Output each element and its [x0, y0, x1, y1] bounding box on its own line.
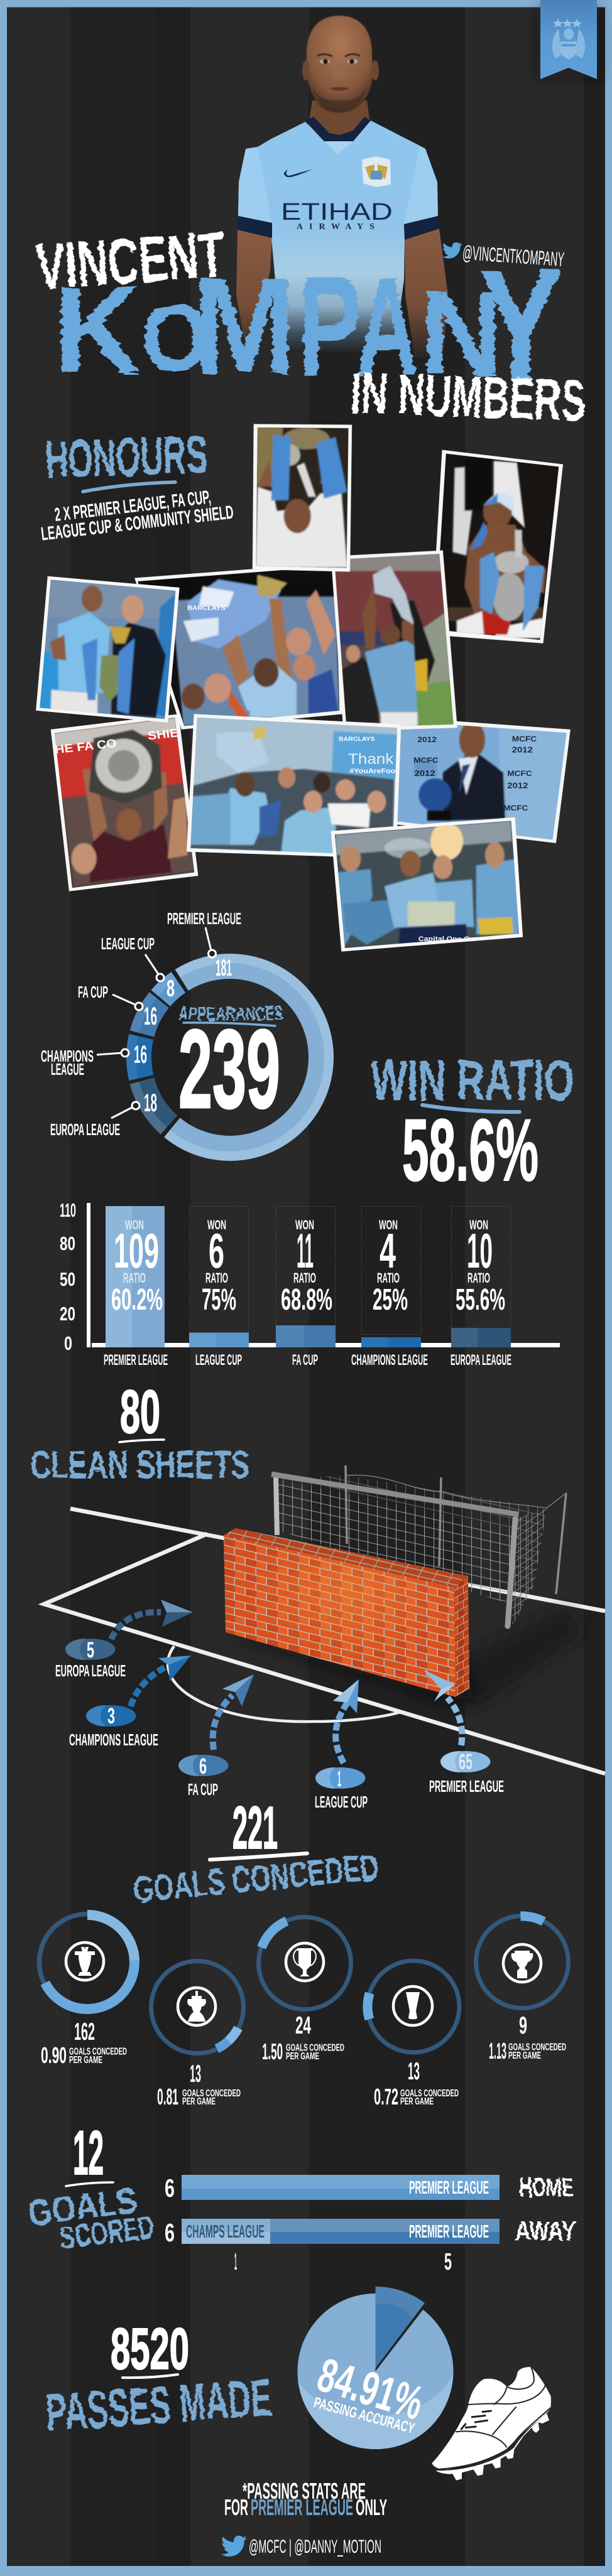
- honours heading: [38, 424, 234, 545]
- footnote: PREMIER LEAGUE: [251, 2494, 353, 2520]
- wall side: [454, 1576, 469, 1697]
- photo: league cup celebration: [331, 817, 523, 952]
- photo: champions with trophy: [253, 424, 352, 572]
- club ribbon with crest: [537, 0, 600, 82]
- passing accuracy pie chart: [298, 2287, 454, 2449]
- arrow: europa league: 5: [87, 1638, 94, 1663]
- arrow: europa league: EUROPA LEAGUE: [55, 1661, 126, 1680]
- nike swoosh: [284, 170, 312, 177]
- goals scored heading: SCORED: [58, 2209, 156, 2256]
- bar: fa cup: FA CUP: [292, 1352, 318, 1369]
- photo: league cup celebration: Capital One Cup: [418, 935, 479, 943]
- bar: league cup: 6: [209, 1223, 224, 1278]
- photo: awards night: MCFC: [507, 769, 532, 778]
- footnote: *PASSING STATS ARE: [243, 2478, 366, 2504]
- bar: league cup: 75%: [202, 1283, 236, 1317]
- photo: fa cup dressing room: [429, 449, 564, 644]
- photo: premier league crowd: [133, 563, 343, 731]
- bar: premier league: RATIO: [123, 1270, 146, 1286]
- segment: europa league: [90, 918, 369, 1197]
- wall top: [224, 1528, 468, 1587]
- photo: awards night: 2012: [415, 768, 435, 778]
- bar: fa cup: [276, 1218, 336, 1369]
- competition labels: LEAGUE CUP: [101, 934, 155, 953]
- photo: title celebration: Thank you: [348, 752, 425, 767]
- icon: europa league trophy: [503, 1944, 541, 1982]
- arrow: league cup: 1: [337, 1767, 341, 1791]
- arrow: fa cup: [178, 1674, 254, 1799]
- values: 9: [519, 2012, 527, 2039]
- collar: [305, 117, 371, 141]
- away goals bar: PREMIER LEAGUE: [409, 2222, 489, 2242]
- ring: league cup: GOALS CONCEDED: [400, 2088, 459, 2099]
- segment: premier league: [94, 921, 366, 1194]
- passes made heading: PASSES MADE: [44, 2368, 274, 2442]
- wins bar chart: [60, 1199, 560, 1369]
- segment: league cup: [90, 918, 369, 1197]
- win ratio: [371, 1048, 574, 1199]
- ring: league cup: [357, 1950, 470, 2110]
- bar: europa league: [451, 1218, 511, 1369]
- passes made heading: 8520: [111, 2316, 189, 2381]
- back stays: [346, 1465, 566, 1594]
- appearances donut chart: [41, 909, 369, 1197]
- appearances heading: APPEARANCES: [178, 1003, 283, 1025]
- bar: premier league: 109: [114, 1223, 159, 1278]
- icon: football boot: [432, 2367, 551, 2481]
- arrow: premier league: [423, 1670, 504, 1796]
- goal with net: [271, 1465, 584, 1708]
- footer credits: [221, 2536, 381, 2557]
- kompany: K: [53, 260, 141, 399]
- bar: league cup: [189, 1218, 249, 1369]
- net: [277, 1479, 513, 1603]
- wins bar chart: PREMIER LEAGUE: [104, 1352, 168, 1369]
- away goals bar: 6: [165, 2218, 175, 2247]
- crest: [552, 19, 585, 60]
- away goals bar: [165, 2216, 576, 2275]
- competition labels: [41, 909, 241, 1139]
- arrow: champions league: 3: [107, 1704, 115, 1728]
- photo: kompany and manager: [35, 576, 180, 723]
- arrow: champions league: [69, 1656, 191, 1749]
- segment values: 16: [134, 1041, 147, 1069]
- photo: awards night: [390, 717, 574, 845]
- ring: fa cup: 0.81: [157, 2084, 178, 2110]
- y-axis labels: 110: [60, 1199, 76, 1221]
- wins bar chart: CHAMPIONS LEAGUE: [351, 1352, 428, 1369]
- home goals bar: 6: [165, 2174, 175, 2202]
- ring: fa cup: 13: [190, 2061, 201, 2088]
- bar: premier league: WON: [125, 1218, 144, 1232]
- home goals bar: PREMIER LEAGUE: [409, 2178, 489, 2198]
- segment values: 18: [144, 1089, 157, 1117]
- honours heading: HONOURS: [44, 424, 208, 489]
- honours text: [38, 485, 234, 545]
- arrow: premier league: 65: [459, 1750, 473, 1774]
- photo collage: [35, 424, 574, 952]
- bar: champions league: 4: [380, 1223, 396, 1278]
- footnote: ONLY: [356, 2494, 387, 2520]
- passing accuracy pie chart: PASSING ACCURACY: [312, 2394, 417, 2437]
- posts and crossbar: [276, 1477, 277, 1535]
- bar: fa cup: 68.8%: [281, 1283, 332, 1317]
- ring: europa league: GOALS CONCEDED: [508, 2042, 566, 2053]
- ring: europa league: [474, 1914, 570, 2064]
- icon: premier league trophy: [66, 1943, 104, 1980]
- photo: awards night: 2012: [512, 745, 533, 754]
- away goals bar: AWAY: [515, 2216, 576, 2246]
- ring: premier league: PER GAME: [69, 2055, 102, 2066]
- icon: champions league trophy: [286, 1943, 324, 1981]
- y-axis labels: [60, 1199, 76, 1354]
- photo: community shield: HE FA CO: [54, 737, 117, 757]
- arrow: league cup: [315, 1679, 368, 1811]
- away goals bar: 5: [444, 2249, 452, 2275]
- values: 162: [74, 2018, 95, 2045]
- ring: europa league: PER GAME: [508, 2051, 541, 2061]
- leader lines: [97, 927, 216, 1118]
- photo: awards night: 2012: [507, 781, 528, 790]
- arrow: premier league: PREMIER LEAGUE: [429, 1777, 504, 1796]
- ring: champions league: [246, 1904, 364, 2064]
- ring: league cup: 13: [408, 2058, 420, 2085]
- ring: champions league: 1.50: [262, 2039, 283, 2064]
- photo: title celebration: [187, 714, 401, 856]
- ring: league cup: 0.72: [374, 2084, 398, 2110]
- clean sheets heading: CLEAN SHEETS: [30, 1443, 250, 1487]
- bar: champions league: WON: [379, 1218, 398, 1232]
- y-axis labels: 50: [60, 1268, 75, 1290]
- ring: league cup: PER GAME: [400, 2096, 434, 2107]
- goals scored heading: 12: [73, 2118, 104, 2187]
- goals conceded heading: [132, 1794, 381, 1911]
- twitter handle: [442, 241, 565, 271]
- dotted bar frames: [190, 1207, 510, 1335]
- bar: fa cup: 11: [297, 1223, 314, 1278]
- ring: champions league: GOALS CONCEDED: [286, 2043, 344, 2053]
- goals scored heading: GOALS: [26, 2180, 139, 2234]
- photo: awards night: 2012: [417, 735, 437, 744]
- sponsor: ETIHAD: [281, 199, 393, 225]
- arrow: fa cup: FA CUP: [188, 1780, 218, 1799]
- boot upper: [432, 2367, 551, 2469]
- photo: awards night: MCFC: [413, 756, 439, 765]
- ring: champions league: PER GAME: [286, 2051, 319, 2062]
- face: [317, 54, 360, 90]
- competition labels: LEAGUE: [51, 1060, 84, 1079]
- wins bar chart: EUROPA LEAGUE: [451, 1352, 511, 1369]
- footnote: [224, 2478, 387, 2520]
- away goals bar: CHAMPS LEAGUE: [186, 2222, 265, 2242]
- kompany: M: [193, 249, 296, 401]
- segment values: [134, 955, 232, 1117]
- appearances donut chart: 181: [216, 955, 232, 981]
- kompany: N: [420, 266, 503, 401]
- home goals bar: HOME: [519, 2172, 574, 2202]
- competition labels: CHAMPIONS: [41, 1047, 94, 1065]
- photo: title celebration: #YouAreFootball: [349, 767, 412, 775]
- goals conceded heading: 221: [232, 1794, 278, 1862]
- icon: league cup trophy: [393, 1986, 432, 2025]
- clean sheets heading: 80: [120, 1377, 160, 1446]
- ring: europa league: 1.13: [489, 2038, 506, 2064]
- arrow: europa league: [55, 1600, 193, 1680]
- kompany: A: [356, 249, 418, 405]
- bar: europa league: RATIO: [467, 1270, 490, 1286]
- player photo: [236, 16, 448, 358]
- bar: europa league: 10: [467, 1223, 493, 1278]
- arrow: fa cup: 6: [199, 1754, 207, 1779]
- y-axis labels: 20: [60, 1303, 75, 1325]
- photo: premier league crowd: BARCLAYS: [187, 605, 226, 612]
- honours text: LEAGUE CUP & COMMUNITY SHIELD: [40, 502, 234, 545]
- boot seams: [437, 2367, 550, 2469]
- club badge on shirt: [362, 156, 391, 187]
- bar: premier league: 60.2%: [111, 1283, 163, 1317]
- goals scored heading: [26, 2118, 156, 2260]
- kompany: Y: [479, 235, 563, 416]
- bar: europa league: WON: [469, 1218, 488, 1232]
- photo: league cup at wembley: [331, 551, 457, 731]
- goals conceded heading: GOALS CONCEDED: [132, 1846, 381, 1911]
- kompany: P: [298, 247, 362, 405]
- ring: premier league: 0.90: [41, 2042, 67, 2068]
- clean sheet arrows: [55, 1600, 504, 1811]
- honours text: 2 X PREMIER LEAGUE, FA CUP,: [53, 487, 212, 525]
- bar: league cup: RATIO: [205, 1270, 228, 1286]
- ring: fa cup: PER GAME: [182, 2096, 216, 2107]
- values: 24: [295, 2012, 311, 2039]
- wall front face: [224, 1535, 456, 1697]
- bar: fa cup: WON: [295, 1218, 314, 1232]
- vincent: VINCENT: [34, 218, 227, 303]
- bar: champions league: RATIO: [377, 1270, 400, 1286]
- bar: premier league: [104, 1206, 168, 1369]
- arms: [236, 230, 272, 358]
- segment values: 8: [167, 976, 175, 1001]
- segment values: 16: [144, 1003, 157, 1030]
- photo: community shield: SHIELD: [147, 725, 197, 743]
- head: [302, 16, 379, 113]
- photo: community shield: [51, 714, 199, 893]
- photo: awards night: MCFC: [503, 804, 528, 812]
- neck: [308, 100, 371, 148]
- bar: champions league: [351, 1218, 428, 1369]
- ring: premier league: [39, 1914, 136, 2068]
- segment: champions league: [111, 939, 349, 1176]
- kompany: [53, 235, 563, 416]
- bar: champions league: 25%: [373, 1283, 408, 1317]
- shirt: [238, 121, 438, 352]
- passes made heading: [44, 2316, 274, 2442]
- bar: fa cup: RATIO: [293, 1270, 316, 1286]
- footnote: FOR: [224, 2494, 248, 2520]
- title: [34, 218, 587, 433]
- y-axis labels: 80: [60, 1232, 75, 1254]
- clean sheet arrows: LEAGUE CUP: [315, 1792, 368, 1811]
- brick wall: [224, 1528, 478, 1701]
- appearances total: 239: [178, 1006, 280, 1131]
- studs and sole: [435, 2410, 550, 2481]
- away goals bar: 1: [234, 2249, 237, 2275]
- kompany: O: [141, 284, 210, 391]
- pitch markings: [44, 1509, 605, 1774]
- bar: league cup: WON: [207, 1218, 226, 1232]
- axes: [87, 1203, 560, 1347]
- passing accuracy pie chart: 84.91%: [312, 2348, 429, 2430]
- competition labels: FA CUP: [78, 983, 108, 1001]
- ring: fa cup: [136, 1946, 259, 2110]
- cuffs: [238, 216, 272, 238]
- bar: europa league: 55.6%: [456, 1283, 505, 1317]
- home goals bar: [165, 2172, 574, 2202]
- ring: premier league: GOALS CONCEDED: [69, 2047, 127, 2057]
- competition labels: EUROPA LEAGUE: [50, 1120, 120, 1139]
- clean sheets heading: [30, 1377, 250, 1487]
- bar: league cup: LEAGUE CUP: [195, 1352, 242, 1369]
- photo: awards night: MCFC: [512, 735, 537, 743]
- icon: fa cup trophy: [178, 1988, 216, 2025]
- segment: fa cup: [109, 936, 351, 1178]
- y-axis labels: 0: [64, 1332, 72, 1354]
- arrow: champions league: CHAMPIONS LEAGUE: [69, 1730, 158, 1749]
- photo: title celebration: BARCLAYS: [339, 736, 375, 743]
- footer credits: @MCFC | @DANNY_MOTION: [249, 2536, 381, 2557]
- player photo: AIRWAYS: [297, 222, 374, 232]
- ring: fa cup: GOALS CONCEDED: [182, 2088, 241, 2099]
- icon: twitter bird: [221, 2536, 247, 2557]
- competition labels: PREMIER LEAGUE: [167, 909, 241, 928]
